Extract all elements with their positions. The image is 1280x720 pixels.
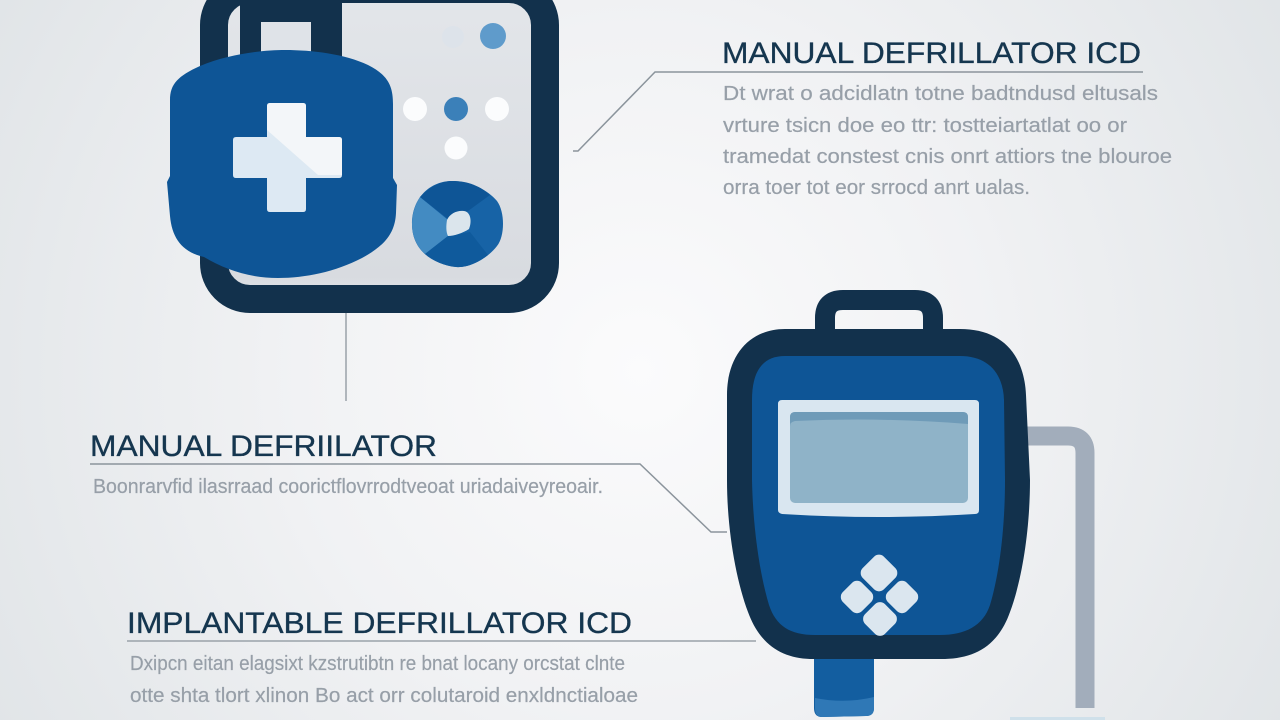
blue case (167, 50, 397, 278)
cable (1026, 436, 1085, 708)
icon: top defibrillator device (167, 0, 545, 299)
heading: MANUAL DEFRIILATOR (90, 430, 437, 463)
white cross (233, 103, 342, 212)
body text: Dxipcn eitan elagsixt kzstrutibtn re bnat locany orcstat clnte (130, 653, 625, 675)
screen display (790, 412, 968, 503)
handle inner (261, 22, 311, 56)
connector line: manual defibrillator callout (90, 464, 727, 532)
connector line: vertical below top device (345, 312, 347, 401)
directional buttons (838, 552, 921, 639)
connector line: manual defibrillator ICD callout (573, 72, 1143, 151)
screen top shade (790, 412, 968, 426)
indicator dots (403, 23, 509, 160)
body text: orra toer tot eor srrocd anrt ualas. (723, 177, 1030, 199)
callout: manual defibrillator ICD (722, 37, 1172, 199)
connector line: implantable defibrillator callout (127, 640, 756, 642)
device frame (214, 0, 545, 299)
body text (130, 653, 638, 707)
lower connector (814, 655, 874, 717)
icon: bottom defibrillator device (727, 300, 1085, 717)
connector tip (815, 697, 874, 717)
blue face (752, 356, 1005, 635)
carrying handle (825, 300, 933, 335)
device body (727, 329, 1030, 659)
cross highlight (267, 103, 342, 175)
handle outer (240, 0, 342, 60)
body text: Dt wrat o adcidlatn totne badtndusd eltusals (723, 83, 1158, 105)
body text: Boonrarvfid ilasrraad coorictflovrrodtveoat uriadaiveyreoair. (93, 476, 603, 498)
body text: tramedat constest cnis onrt attiors tne blouroe (723, 146, 1172, 168)
faint base glimpse (1010, 717, 1105, 720)
body text (723, 83, 1172, 199)
screen bezel (778, 400, 979, 517)
body text: otte shta tlort xlinon Bo act orr colutaroid enxldnctialoae (130, 685, 638, 707)
round dial (412, 181, 503, 267)
callout: implantable defibrillator ICD (127, 607, 638, 707)
body text: vrture tsicn doe eo ttr: tostteiartatlat oo or (723, 115, 1127, 137)
heading: IMPLANTABLE DEFRILLATOR ICD (127, 607, 632, 640)
heading: MANUAL DEFRILLATOR ICD (722, 37, 1141, 70)
callout: manual defibrillator (90, 430, 603, 498)
